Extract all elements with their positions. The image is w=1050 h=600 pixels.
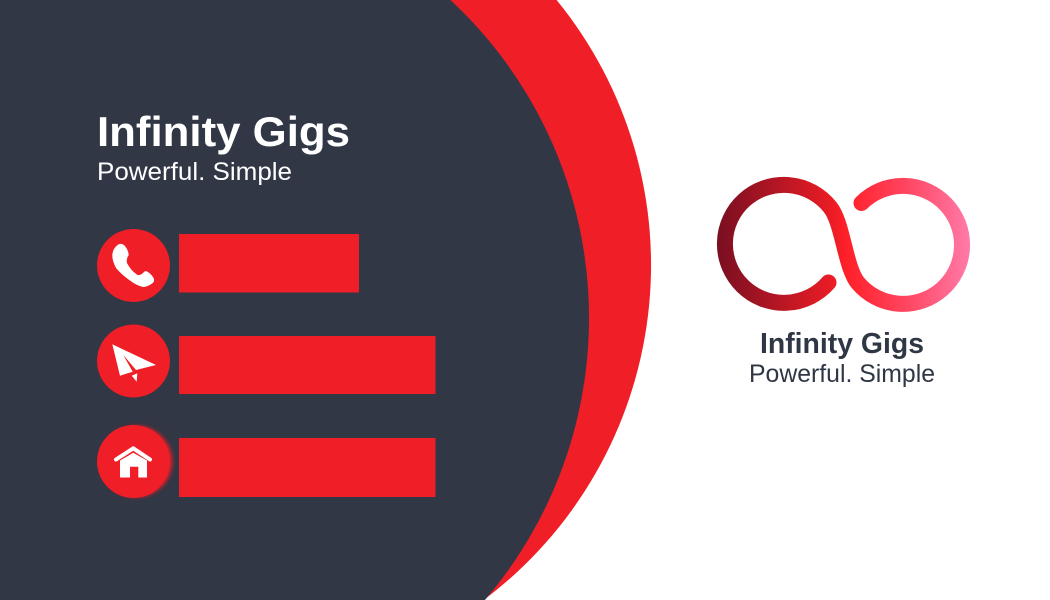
logo: [725, 185, 962, 388]
icon: paper plane: [97, 324, 170, 398]
tagline: Powerful. Simple: [97, 158, 292, 186]
icon: phone: [97, 229, 170, 302]
dark panel: [0, 0, 589, 600]
contact row: phone: [97, 229, 359, 302]
title: Infinity Gigs: [97, 108, 350, 155]
icon: infinity symbol: [725, 185, 962, 304]
logo name: Infinity Gigs: [760, 328, 924, 360]
left heading: [97, 108, 350, 186]
logo tagline: Powerful. Simple: [749, 360, 935, 388]
address bar: [179, 438, 436, 497]
contact row: email: [97, 324, 436, 398]
icon: house: [97, 425, 172, 498]
contact row: address: [97, 425, 436, 498]
email bar: [179, 336, 436, 394]
phone bar: [179, 234, 359, 292]
red arc shape: [0, 0, 651, 600]
